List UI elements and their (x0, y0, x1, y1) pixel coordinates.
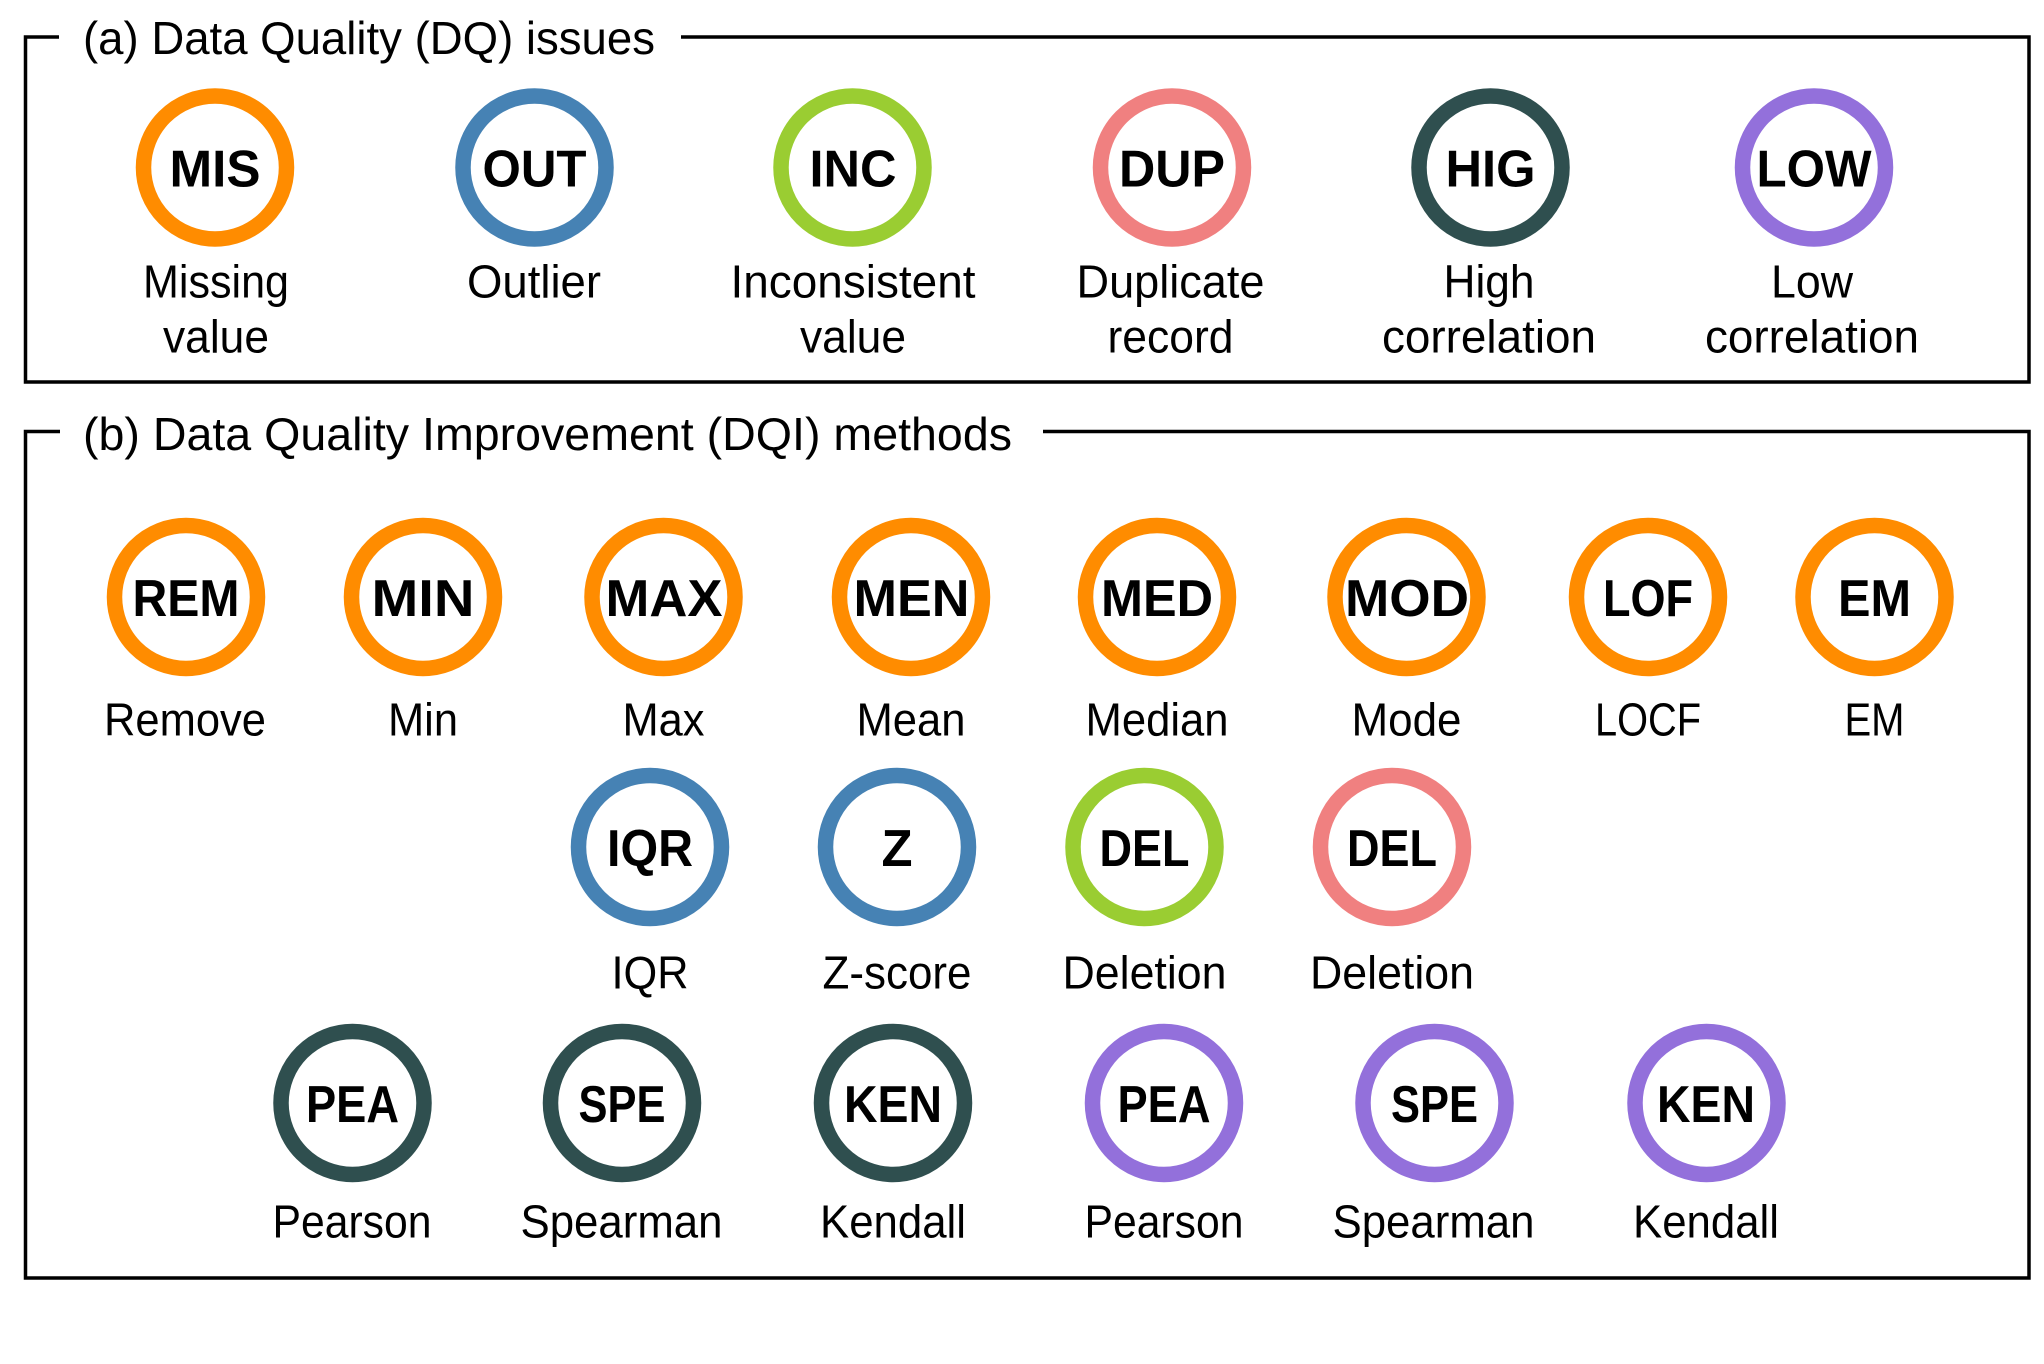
badge: LOW Low correlation: Low (1771, 256, 1854, 308)
badge: OUT Outlier: OUT (482, 140, 587, 198)
badge: MEN Mean: Mean (856, 694, 966, 746)
panel b frame (26, 432, 2029, 1278)
badge: KEN Kendall (low correlation) (1633, 1032, 1779, 1248)
badge: HIG High correlation: correlation (1382, 310, 1596, 362)
badge: MOD Mode: Mode (1352, 694, 1462, 746)
badge: MOD Mode (1335, 526, 1478, 746)
badge: DEL Deletion (duplicate): Deletion (1310, 946, 1474, 998)
badge: PEA Pearson (high correlation) (272, 1032, 432, 1248)
badge: SPE Spearman (low correlation): Spearman (1332, 1196, 1534, 1248)
badge: MIS Missing value (143, 96, 289, 362)
badge: LOF LOCF: LOF (1603, 570, 1693, 628)
badge: MED Median: Median (1086, 694, 1228, 746)
badge: KEN Kendall (low correlation): Kendall (1633, 1196, 1779, 1248)
badge: MED Median (1086, 526, 1228, 746)
badge: SPE Spearman (high correlation): SPE (578, 1076, 666, 1134)
badge: REM Remove: Remove (104, 694, 266, 746)
badge: DEL Deletion (duplicate): DEL (1347, 820, 1437, 878)
badge: LOW Low correlation: correlation (1705, 310, 1919, 362)
badge: MAX Max: MAX (606, 570, 723, 628)
badge: DEL Deletion (inconsistent): DEL (1100, 820, 1190, 878)
badge: INC Inconsistent value: Inconsistent (730, 256, 976, 308)
panel: (b) Data Quality Improvement methods (26, 408, 2029, 1278)
badge: OUT Outlier (463, 96, 606, 308)
badge: REM Remove (104, 526, 266, 746)
badge: IQR IQR: IQR (607, 820, 693, 878)
badge: HIG High correlation: HIG (1446, 140, 1536, 198)
badge: INC Inconsistent value: INC (810, 140, 896, 198)
badge: MAX Max: Max (622, 694, 704, 746)
badge: MOD Mode: MOD (1345, 570, 1469, 628)
badge: EM EM: EM (1844, 694, 1904, 746)
badge: INC Inconsistent value (730, 96, 976, 362)
badge: MED Median: MED (1101, 570, 1213, 628)
badge: PEA Pearson (low correlation): Pearson (1084, 1196, 1244, 1248)
badge: MIN Min: Min (388, 694, 458, 746)
badge: DUP Duplicate record: record (1108, 310, 1234, 362)
badge: LOF LOCF: LOCF (1595, 694, 1701, 746)
badge: DUP Duplicate record: Duplicate (1076, 256, 1264, 308)
badge: LOW Low correlation (1705, 96, 1919, 362)
badge: PEA Pearson (low correlation): PEA (1118, 1076, 1210, 1134)
badge: SPE Spearman (low correlation): SPE (1391, 1076, 1478, 1134)
badge: MIS Missing value: Missing (143, 256, 289, 308)
badge: MIN Min (352, 526, 494, 746)
badge: LOF LOCF (1576, 526, 1720, 746)
badge: Z Z-score (822, 776, 972, 998)
badge: KEN Kendall (high correlation): Kendall (820, 1196, 966, 1248)
badge: KEN Kendall (high correlation) (820, 1032, 966, 1248)
badge: MEN Mean: MEN (854, 570, 970, 628)
badge: PEA Pearson (high correlation): PEA (306, 1076, 399, 1134)
badge: MIS Missing value: MIS (170, 140, 260, 198)
badge: EM EM (1803, 526, 1946, 746)
badge: MAX Max (592, 526, 735, 746)
badge: REM Remove: REM (132, 570, 240, 628)
badge: SPE Spearman (high correlation): Spearman (520, 1196, 722, 1248)
badge: MEN Mean (840, 526, 982, 746)
badge: LOW Low correlation: LOW (1756, 140, 1872, 198)
badge: DEL Deletion (inconsistent): Deletion (1062, 946, 1226, 998)
badge: HIG High correlation (1382, 96, 1596, 362)
badge: DUP Duplicate record (1076, 96, 1264, 362)
badge: IQR IQR: IQR (612, 946, 688, 998)
panel: (a) Data Quality issues (26, 12, 2029, 382)
heading: panel a: (a) Data Quality (DQ) issues (83, 12, 655, 64)
badge: Z Z-score: Z-score (822, 946, 972, 998)
badge: Z Z-score: Z (882, 820, 912, 878)
badge: HIG High correlation: High (1444, 256, 1534, 308)
badge: EM EM: EM (1838, 570, 1911, 628)
badge: SPE Spearman (low correlation) (1332, 1032, 1534, 1248)
badge: MIS Missing value: value (163, 310, 269, 362)
badge: KEN Kendall (high correlation): KEN (844, 1076, 942, 1134)
badge: INC Inconsistent value: value (800, 310, 906, 362)
badge: DEL Deletion (duplicate) (1310, 776, 1474, 998)
badge: DUP Duplicate record: DUP (1119, 140, 1225, 198)
heading: panel b: (b) Data Quality Improvement (DQI) methods (83, 408, 1012, 460)
badge: MIN Min: MIN (372, 570, 474, 628)
badge: DEL Deletion (inconsistent) (1062, 776, 1226, 998)
badge: PEA Pearson (high correlation): Pearson (272, 1196, 432, 1248)
badge: PEA Pearson (low correlation) (1084, 1032, 1244, 1248)
badge: SPE Spearman (high correlation) (520, 1032, 722, 1248)
badge: IQR IQR (578, 776, 722, 998)
panel a frame (26, 37, 2029, 382)
badge: OUT Outlier: Outlier (467, 256, 601, 308)
badge: KEN Kendall (low correlation): KEN (1657, 1076, 1755, 1134)
